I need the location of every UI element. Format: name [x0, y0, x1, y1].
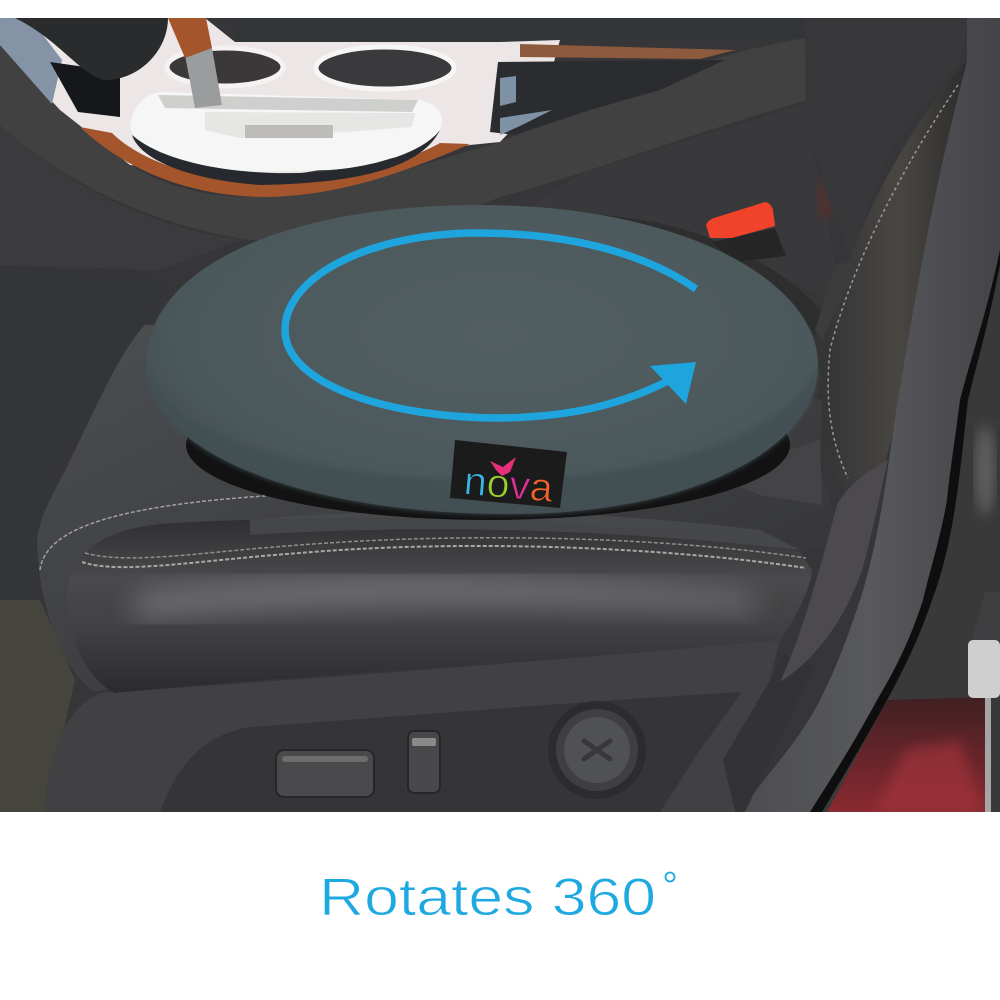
- interior walls and floor: [0, 18, 1000, 812]
- upper dash strip: [235, 18, 810, 42]
- cup holder left: [167, 48, 283, 86]
- red seatbelt buckle: [706, 202, 786, 262]
- seat base trim and power controls: [45, 640, 815, 812]
- wood trim: [80, 127, 470, 197]
- butterfly mark: [490, 457, 516, 476]
- leather seat upper surface: [37, 320, 835, 692]
- logo text: nova: [462, 459, 555, 511]
- photo: car interior: [0, 18, 1000, 812]
- red glow: [818, 180, 834, 220]
- caption: Rotates 360: [319, 868, 656, 927]
- lumbar knob: [548, 701, 646, 799]
- seat back and bolster: [805, 18, 970, 490]
- dash band below console: [0, 38, 808, 240]
- leather seat front bolster: [67, 511, 812, 693]
- steering wheel: [15, 18, 168, 80]
- nova logo patch: [450, 440, 567, 511]
- cup holder right: [316, 47, 454, 89]
- degree symbol: [666, 872, 674, 882]
- wood trim right: [520, 44, 735, 59]
- swivel base plate: [186, 434, 790, 520]
- shifter stem: [185, 48, 222, 108]
- seat belt housing: [600, 215, 830, 335]
- gray swivel cushion: [146, 205, 818, 514]
- center console with cup holders and shifter: [0, 18, 735, 197]
- shift tray: [130, 92, 442, 172]
- door seal strip: [740, 18, 1000, 812]
- rotation arrow: [285, 233, 696, 418]
- seat switch vertical: [408, 731, 440, 793]
- seat switch horizontal: [276, 750, 374, 797]
- grey fabric strip: [780, 460, 888, 682]
- dark right vent: [490, 60, 725, 135]
- inner control panel: [160, 692, 742, 812]
- door body with red panel: [810, 250, 1000, 812]
